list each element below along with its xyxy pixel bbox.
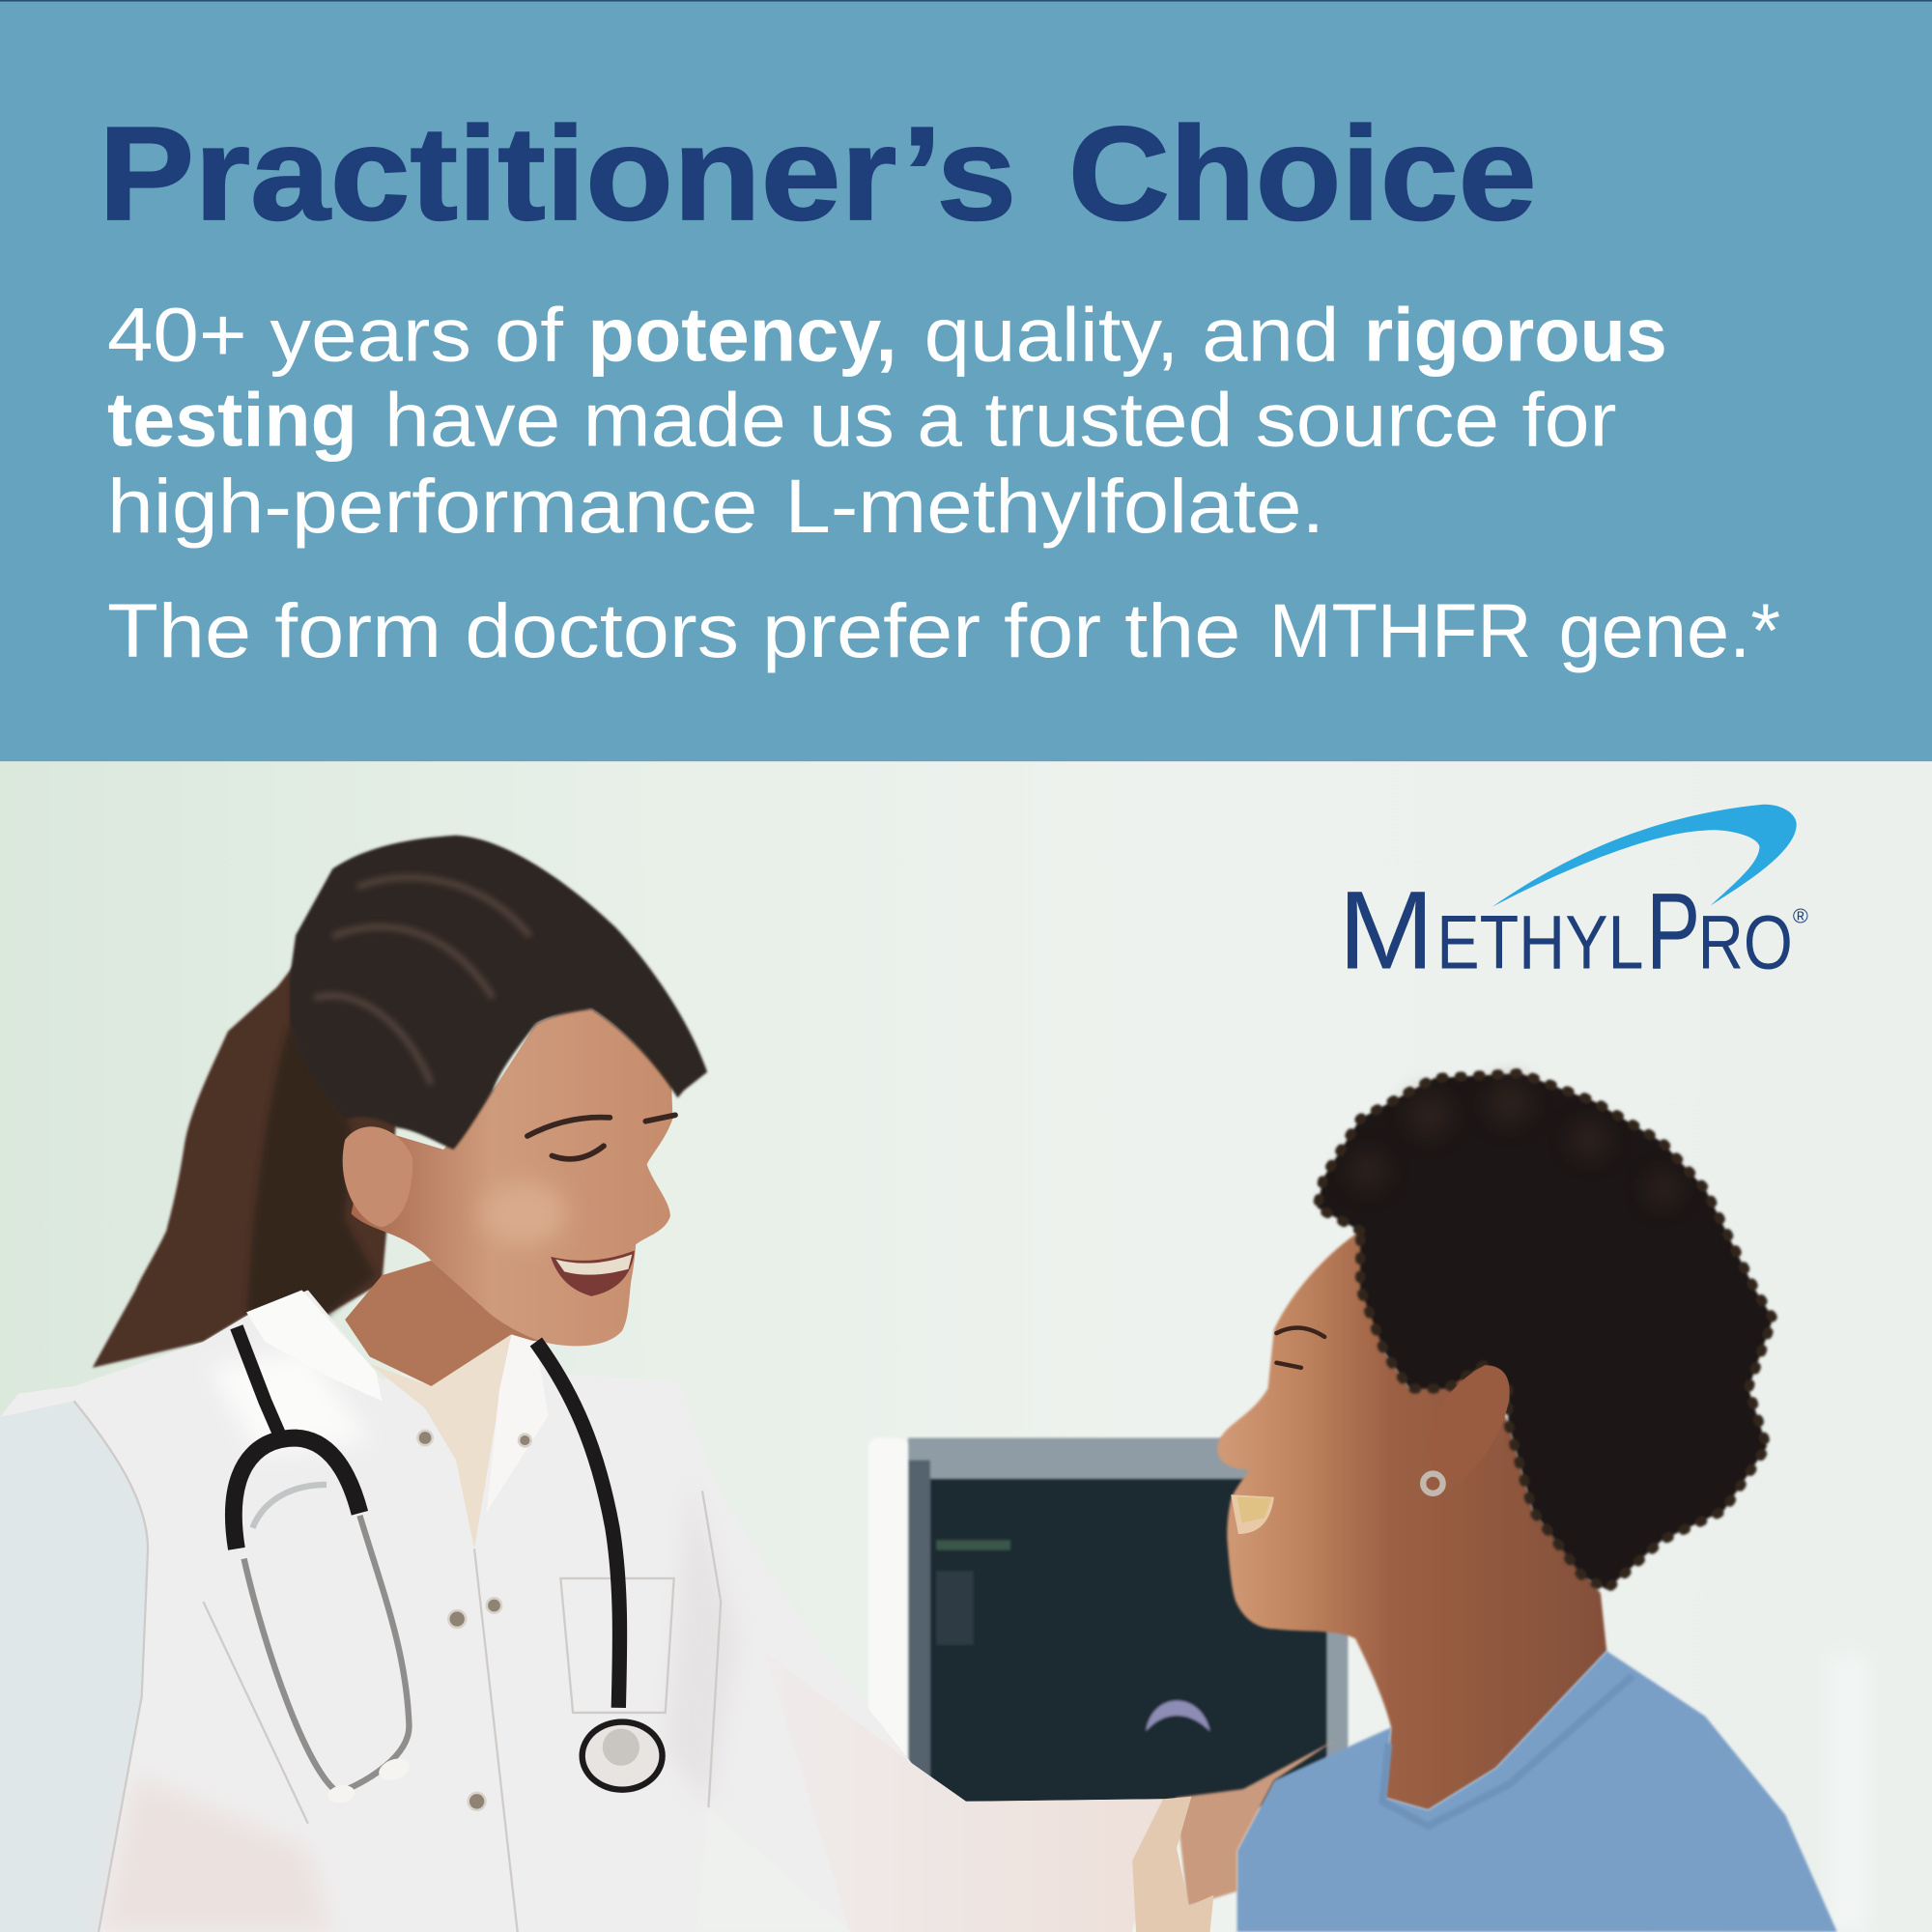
logo wordmark	[1338, 869, 1793, 993]
body text: L-methylfolate.	[784, 463, 1324, 549]
blue shirt	[1237, 1651, 1837, 1932]
heading	[99, 99, 1537, 248]
doctor	[0, 836, 1163, 1932]
doctor hand and cuff	[1132, 1740, 1336, 1932]
eyebrow and eye	[1276, 1328, 1324, 1368]
neck and face	[1217, 1231, 1606, 1810]
coat shading	[0, 1350, 1163, 1932]
body text: potency,	[587, 292, 897, 378]
heading: Choice	[1068, 99, 1537, 248]
patient	[1132, 1073, 1837, 1932]
logo wordmark: M	[1338, 869, 1435, 993]
coat seams and pocket	[74, 1401, 721, 1932]
photo: doctor and patient scene	[0, 761, 1932, 1932]
smile	[1231, 1494, 1274, 1534]
inner shirt	[370, 1334, 511, 1548]
cheek highlight	[482, 1181, 565, 1246]
dark hair strands	[246, 1024, 376, 1321]
face	[352, 1009, 672, 1346]
tagline: MTHFR	[1269, 587, 1531, 673]
panel: blue header	[0, 0, 1932, 761]
tagline: The form doctors prefer for the	[107, 587, 1240, 673]
logo: MethylPro	[1338, 805, 1808, 993]
logo wordmark: RO	[1698, 899, 1793, 985]
hair highlight strands	[314, 877, 529, 1084]
ear	[343, 1126, 412, 1227]
body text: quality, and	[924, 292, 1339, 378]
logo wordmark: P	[1646, 870, 1700, 992]
earring	[1423, 1474, 1443, 1493]
shirt collar seam	[1382, 1676, 1633, 1826]
back hair	[93, 955, 407, 1368]
body text: high-performance	[107, 463, 757, 549]
body text: 40+ years of	[107, 292, 564, 378]
smile	[551, 1251, 635, 1296]
front hair	[290, 836, 707, 1150]
body text: testing	[107, 377, 357, 463]
lab coat	[0, 1290, 1163, 1932]
body text: rigorous	[1364, 292, 1667, 378]
logo wordmark: ETHYL	[1436, 899, 1644, 985]
ear	[1429, 1365, 1510, 1489]
wall background	[0, 761, 1932, 1932]
registered mark: ®	[1793, 903, 1808, 927]
monitor	[868, 1438, 1348, 1807]
wall gap below arm	[696, 1807, 850, 1932]
neck	[345, 1261, 542, 1386]
tagline	[107, 587, 1780, 673]
collar	[246, 1290, 382, 1401]
body text	[107, 292, 1667, 549]
curly hair	[1318, 1073, 1773, 1589]
logo swoosh	[1492, 805, 1797, 907]
hair texture	[1348, 1081, 1681, 1207]
heading: Practitioner’s	[99, 99, 1016, 248]
coat buttons	[417, 1431, 531, 1810]
stethoscope	[234, 1327, 666, 1804]
tagline: gene.*	[1559, 587, 1780, 673]
body text: have made us a trusted source for	[384, 377, 1616, 463]
eye and brow	[527, 1115, 675, 1159]
